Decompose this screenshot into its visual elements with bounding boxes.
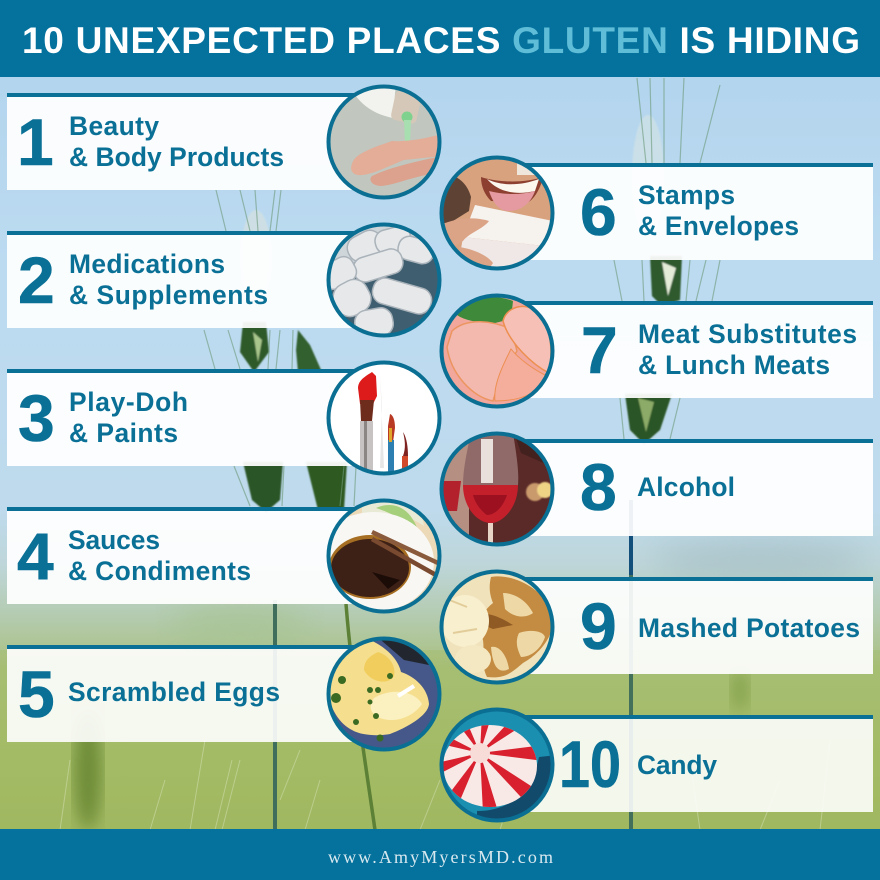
- label: & Condiments: [68, 556, 251, 586]
- label: & Body Products: [69, 142, 284, 172]
- number 5: 5: [18, 657, 55, 731]
- label: & Paints: [69, 418, 178, 448]
- icon: licking an envelope: [437, 153, 557, 273]
- label: Stamps: [638, 180, 735, 210]
- icon: lotion on hand: [324, 82, 444, 202]
- number 7: 7: [581, 313, 618, 387]
- number 10: 10: [559, 727, 621, 801]
- label: Scrambled Eggs: [68, 677, 280, 707]
- icon: soy sauce with chopsticks: [326, 498, 442, 614]
- icon: mashed potatoes with gravy: [437, 567, 557, 687]
- header bar: [0, 0, 880, 77]
- label: & Envelopes: [638, 211, 799, 241]
- icon: glass of red wine: [437, 429, 557, 549]
- label: Candy: [637, 750, 717, 780]
- label: Beauty: [69, 111, 159, 141]
- label: Medications: [69, 249, 225, 279]
- number 6: 6: [580, 175, 617, 249]
- item 3: play-doh and paints: [7, 358, 444, 478]
- footer bar: [0, 829, 880, 880]
- item 6: stamps and envelopes: [437, 153, 873, 273]
- label: Meat Substitutes: [638, 319, 857, 349]
- label: & Supplements: [69, 280, 268, 310]
- item 9: mashed potatoes: [437, 567, 873, 687]
- number 9: 9: [580, 589, 617, 663]
- icon: sliced ham: [437, 291, 557, 411]
- label: Alcohol: [637, 472, 735, 502]
- item 8: alcohol: [437, 429, 873, 549]
- icon: paint brushes: [324, 358, 444, 478]
- footer url: www.AmyMyersMD.com: [328, 847, 553, 867]
- item 5: scrambled eggs: [7, 634, 444, 754]
- number 3: 3: [18, 381, 55, 455]
- item 2: medications and supplements: [7, 220, 444, 340]
- label: Play-Doh: [69, 387, 188, 417]
- label: Sauces: [68, 525, 160, 555]
- item 4: sauces and condiments: [7, 496, 444, 616]
- icon: scrambled eggs on plate: [324, 634, 444, 754]
- wheat heads: [240, 115, 682, 512]
- icon: pills: [326, 222, 442, 338]
- number 4: 4: [17, 519, 54, 593]
- item 10: candy: [440, 708, 873, 822]
- wheat stems: [275, 500, 631, 830]
- title: 10 UNEXPECTED PLACES GLUTEN IS HIDING: [22, 20, 860, 61]
- label: Mashed Potatoes: [638, 613, 860, 643]
- wheat awns: [204, 78, 720, 506]
- number 1: 1: [17, 105, 54, 179]
- number 2: 2: [18, 243, 55, 317]
- number 8: 8: [580, 450, 617, 524]
- item 7: meat substitutes and lunch meats: [437, 291, 873, 411]
- label: & Lunch Meats: [638, 350, 830, 380]
- item 1: beauty and body products: [7, 82, 444, 202]
- icon: peppermint candy: [440, 708, 554, 822]
